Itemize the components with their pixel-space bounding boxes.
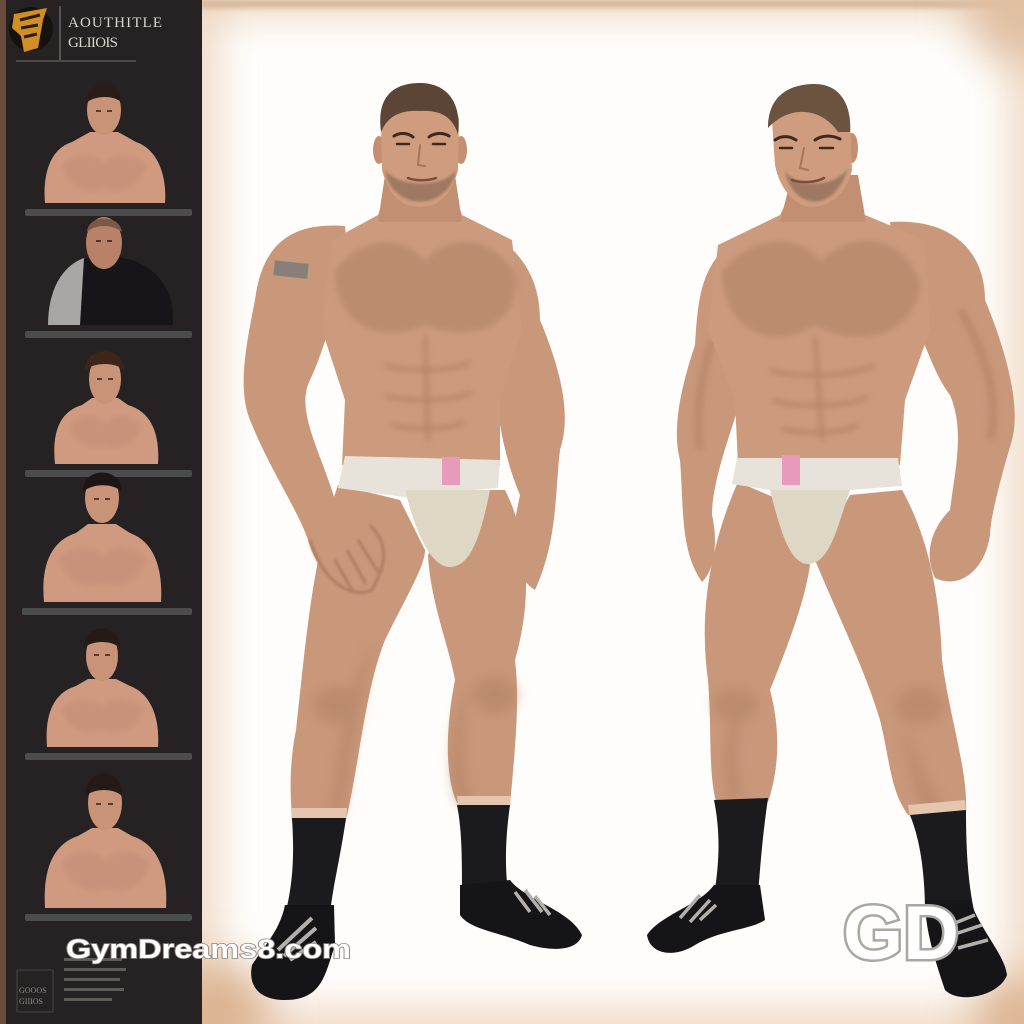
abdomen shading xyxy=(385,335,472,440)
abdomen shading xyxy=(770,335,875,440)
neck xyxy=(780,175,866,222)
left arm xyxy=(244,226,384,593)
right leg xyxy=(428,490,526,805)
portrait 6 xyxy=(25,774,192,921)
small notes block: GIIIOS xyxy=(19,997,43,1006)
right sock xyxy=(910,810,975,915)
left sock band xyxy=(291,808,347,822)
face xyxy=(394,133,449,180)
small notes block xyxy=(17,958,126,1012)
left leg xyxy=(705,482,810,802)
ears xyxy=(373,136,467,164)
leg shading xyxy=(713,687,945,812)
small notes block: GOOOS xyxy=(19,986,47,995)
briefs xyxy=(732,458,902,497)
briefs xyxy=(338,456,500,500)
left shoe laces xyxy=(278,918,316,960)
left arm xyxy=(677,240,743,582)
chest shading xyxy=(722,241,920,337)
right arm xyxy=(890,222,1015,581)
sidebar heading xyxy=(16,6,162,61)
watermark: GD logo: GD xyxy=(843,891,959,976)
left shoe xyxy=(647,885,765,953)
right sock xyxy=(457,805,510,890)
panel: character portraits sidebar xyxy=(0,0,202,1024)
logo icon xyxy=(9,7,53,52)
head xyxy=(772,101,852,207)
tattoo xyxy=(273,260,309,279)
left hand outline xyxy=(310,525,384,593)
right sock band xyxy=(457,796,511,807)
right shoe laces xyxy=(515,890,550,915)
hair xyxy=(768,84,850,132)
sidebar heading: GLIIOIS xyxy=(68,35,118,51)
portrait 4 xyxy=(22,472,192,615)
portrait 5 xyxy=(25,628,192,760)
right leg xyxy=(815,490,966,815)
torso xyxy=(708,195,930,465)
left shoe laces xyxy=(680,895,716,922)
left leg xyxy=(291,485,425,820)
figure: three-quarter view xyxy=(647,84,1015,997)
torso xyxy=(322,195,522,465)
arm shading xyxy=(698,310,993,450)
right shoe xyxy=(925,900,1007,997)
watermark: site name: GymDreams8.com xyxy=(66,934,351,964)
stubble xyxy=(385,170,456,202)
right arm xyxy=(495,236,565,590)
chest shading xyxy=(335,242,516,333)
left shoe xyxy=(251,905,335,1000)
portrait 2 xyxy=(25,217,192,338)
portrait 3 xyxy=(25,351,192,477)
right shoe laces xyxy=(950,915,988,948)
ear xyxy=(846,133,858,163)
tag xyxy=(782,455,800,485)
portrait 1 xyxy=(25,84,192,216)
face xyxy=(775,136,840,182)
right sock band xyxy=(908,800,966,817)
tag xyxy=(442,457,460,485)
sidebar heading: AOUTHITLE xyxy=(68,15,162,31)
stubble xyxy=(785,168,848,202)
figure: front view xyxy=(244,83,582,1000)
leg shading xyxy=(313,640,517,815)
right shoe xyxy=(460,880,582,949)
left sock xyxy=(285,818,346,915)
neck xyxy=(378,175,462,222)
hair xyxy=(380,83,459,134)
head xyxy=(381,101,459,207)
left sock xyxy=(714,798,768,895)
